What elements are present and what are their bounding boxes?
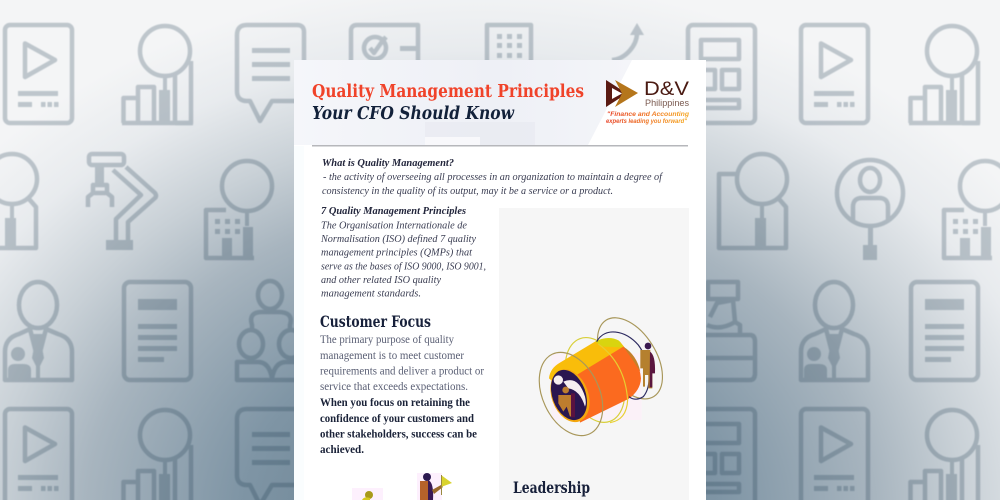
logo: D&V Philippines <box>606 79 690 125</box>
heading: Customer Focus: Customer Focus <box>320 312 431 331</box>
icon: video document <box>5 409 72 500</box>
text block: 7 quality management principles: management principles (QMPs) that <box>321 246 473 258</box>
text block: 7 quality management principles: 7 Quality Management Principles <box>321 205 466 217</box>
text block: what is quality management: consistency in the quality of its output, may it be a service or a product. <box>322 185 613 197</box>
icon: magnifier chart <box>909 410 980 500</box>
orbit rings back <box>554 306 676 431</box>
text block: customer focus body: requirements and deliver a product or <box>320 364 484 378</box>
text block: customer focus body: service that exceeds expectations. <box>320 379 468 393</box>
text block: what is quality management <box>322 157 664 197</box>
logo: D&V Philippines: Philippines <box>645 98 690 108</box>
heading: Leadership: Leadership <box>513 478 590 497</box>
icon: speech bubble <box>237 25 304 121</box>
icon: magnifier building <box>206 161 272 260</box>
text block: 7 quality management principles <box>320 205 486 300</box>
text block: 7 quality management principles: and other related ISO quality <box>321 274 441 286</box>
icon: magnifier chart <box>909 26 980 125</box>
icon: robot arm <box>88 154 156 250</box>
icon: office building <box>487 25 531 65</box>
icon: rising arrow <box>612 23 644 60</box>
logo: D&V Philippines: "Finance and Accounting <box>607 112 689 118</box>
text block: customer focus body: The primary purpose of quality <box>320 332 454 346</box>
icon: video document <box>801 25 868 123</box>
text block: what is quality management: - the activity of overseeing all processes in an organization to maintain a degree of <box>323 171 664 183</box>
icon: magnifier document <box>0 154 37 248</box>
panel: document page <box>294 60 706 500</box>
text block: customer focus body <box>320 332 484 456</box>
title <box>312 82 584 124</box>
text block: customer focus body: confidence of your customers and <box>320 411 474 425</box>
panel: illustration background <box>499 208 689 500</box>
icon: target checklist <box>351 25 420 65</box>
icon: logo arrows <box>606 80 638 107</box>
icon: report document <box>911 282 978 380</box>
text block: 7 quality management principles: serve as the bases of ISO 9000, ISO 9001, <box>321 260 486 272</box>
icon: magnifier chart <box>122 410 193 500</box>
illustration: cylinder with people and orbits <box>527 306 676 446</box>
text block: what is quality management: What is Quality Management? <box>322 157 454 169</box>
logo: D&V Philippines: D&V <box>644 79 689 100</box>
icon: report document <box>124 282 191 380</box>
icon: layout document <box>688 25 755 123</box>
icon: manager <box>5 282 72 380</box>
icon: magnifier building <box>944 161 1000 260</box>
person standing <box>640 343 655 388</box>
icon: magnifier document <box>719 154 787 248</box>
icon: speech bubble <box>237 409 304 500</box>
logo: D&V Philippines: experts leading you forward" <box>606 119 687 125</box>
text block: 7 quality management principles: management standards. <box>321 288 421 300</box>
icon: video document <box>801 409 868 500</box>
illustration: people with flag <box>352 473 452 500</box>
icon: group of people <box>237 281 308 380</box>
title: Quality Management Principles <box>312 82 584 102</box>
text block: customer focus body: other stakeholders, success can be <box>320 426 478 440</box>
icon: magnifier person <box>837 160 903 260</box>
icon: video document <box>5 25 72 123</box>
text block: 7 quality management principles: Normalisation (ISO) defined 7 quality <box>320 233 476 245</box>
orbit rings front <box>527 332 649 446</box>
cylinder body <box>543 338 641 428</box>
icon: layout document <box>688 409 755 500</box>
text block: customer focus body: achieved. <box>320 442 364 456</box>
title: Your CFO Should Know <box>312 104 515 124</box>
text block: customer focus body: management is to meet customer <box>320 348 464 362</box>
icon: magnifier chart <box>122 26 193 125</box>
text block: 7 quality management principles: The Organisation Internationale de <box>321 220 467 232</box>
text block: customer focus body: When you focus on retaining the <box>320 395 471 409</box>
header band <box>294 60 632 145</box>
icon: approval stamp <box>690 282 755 380</box>
icon: manager <box>801 282 868 380</box>
